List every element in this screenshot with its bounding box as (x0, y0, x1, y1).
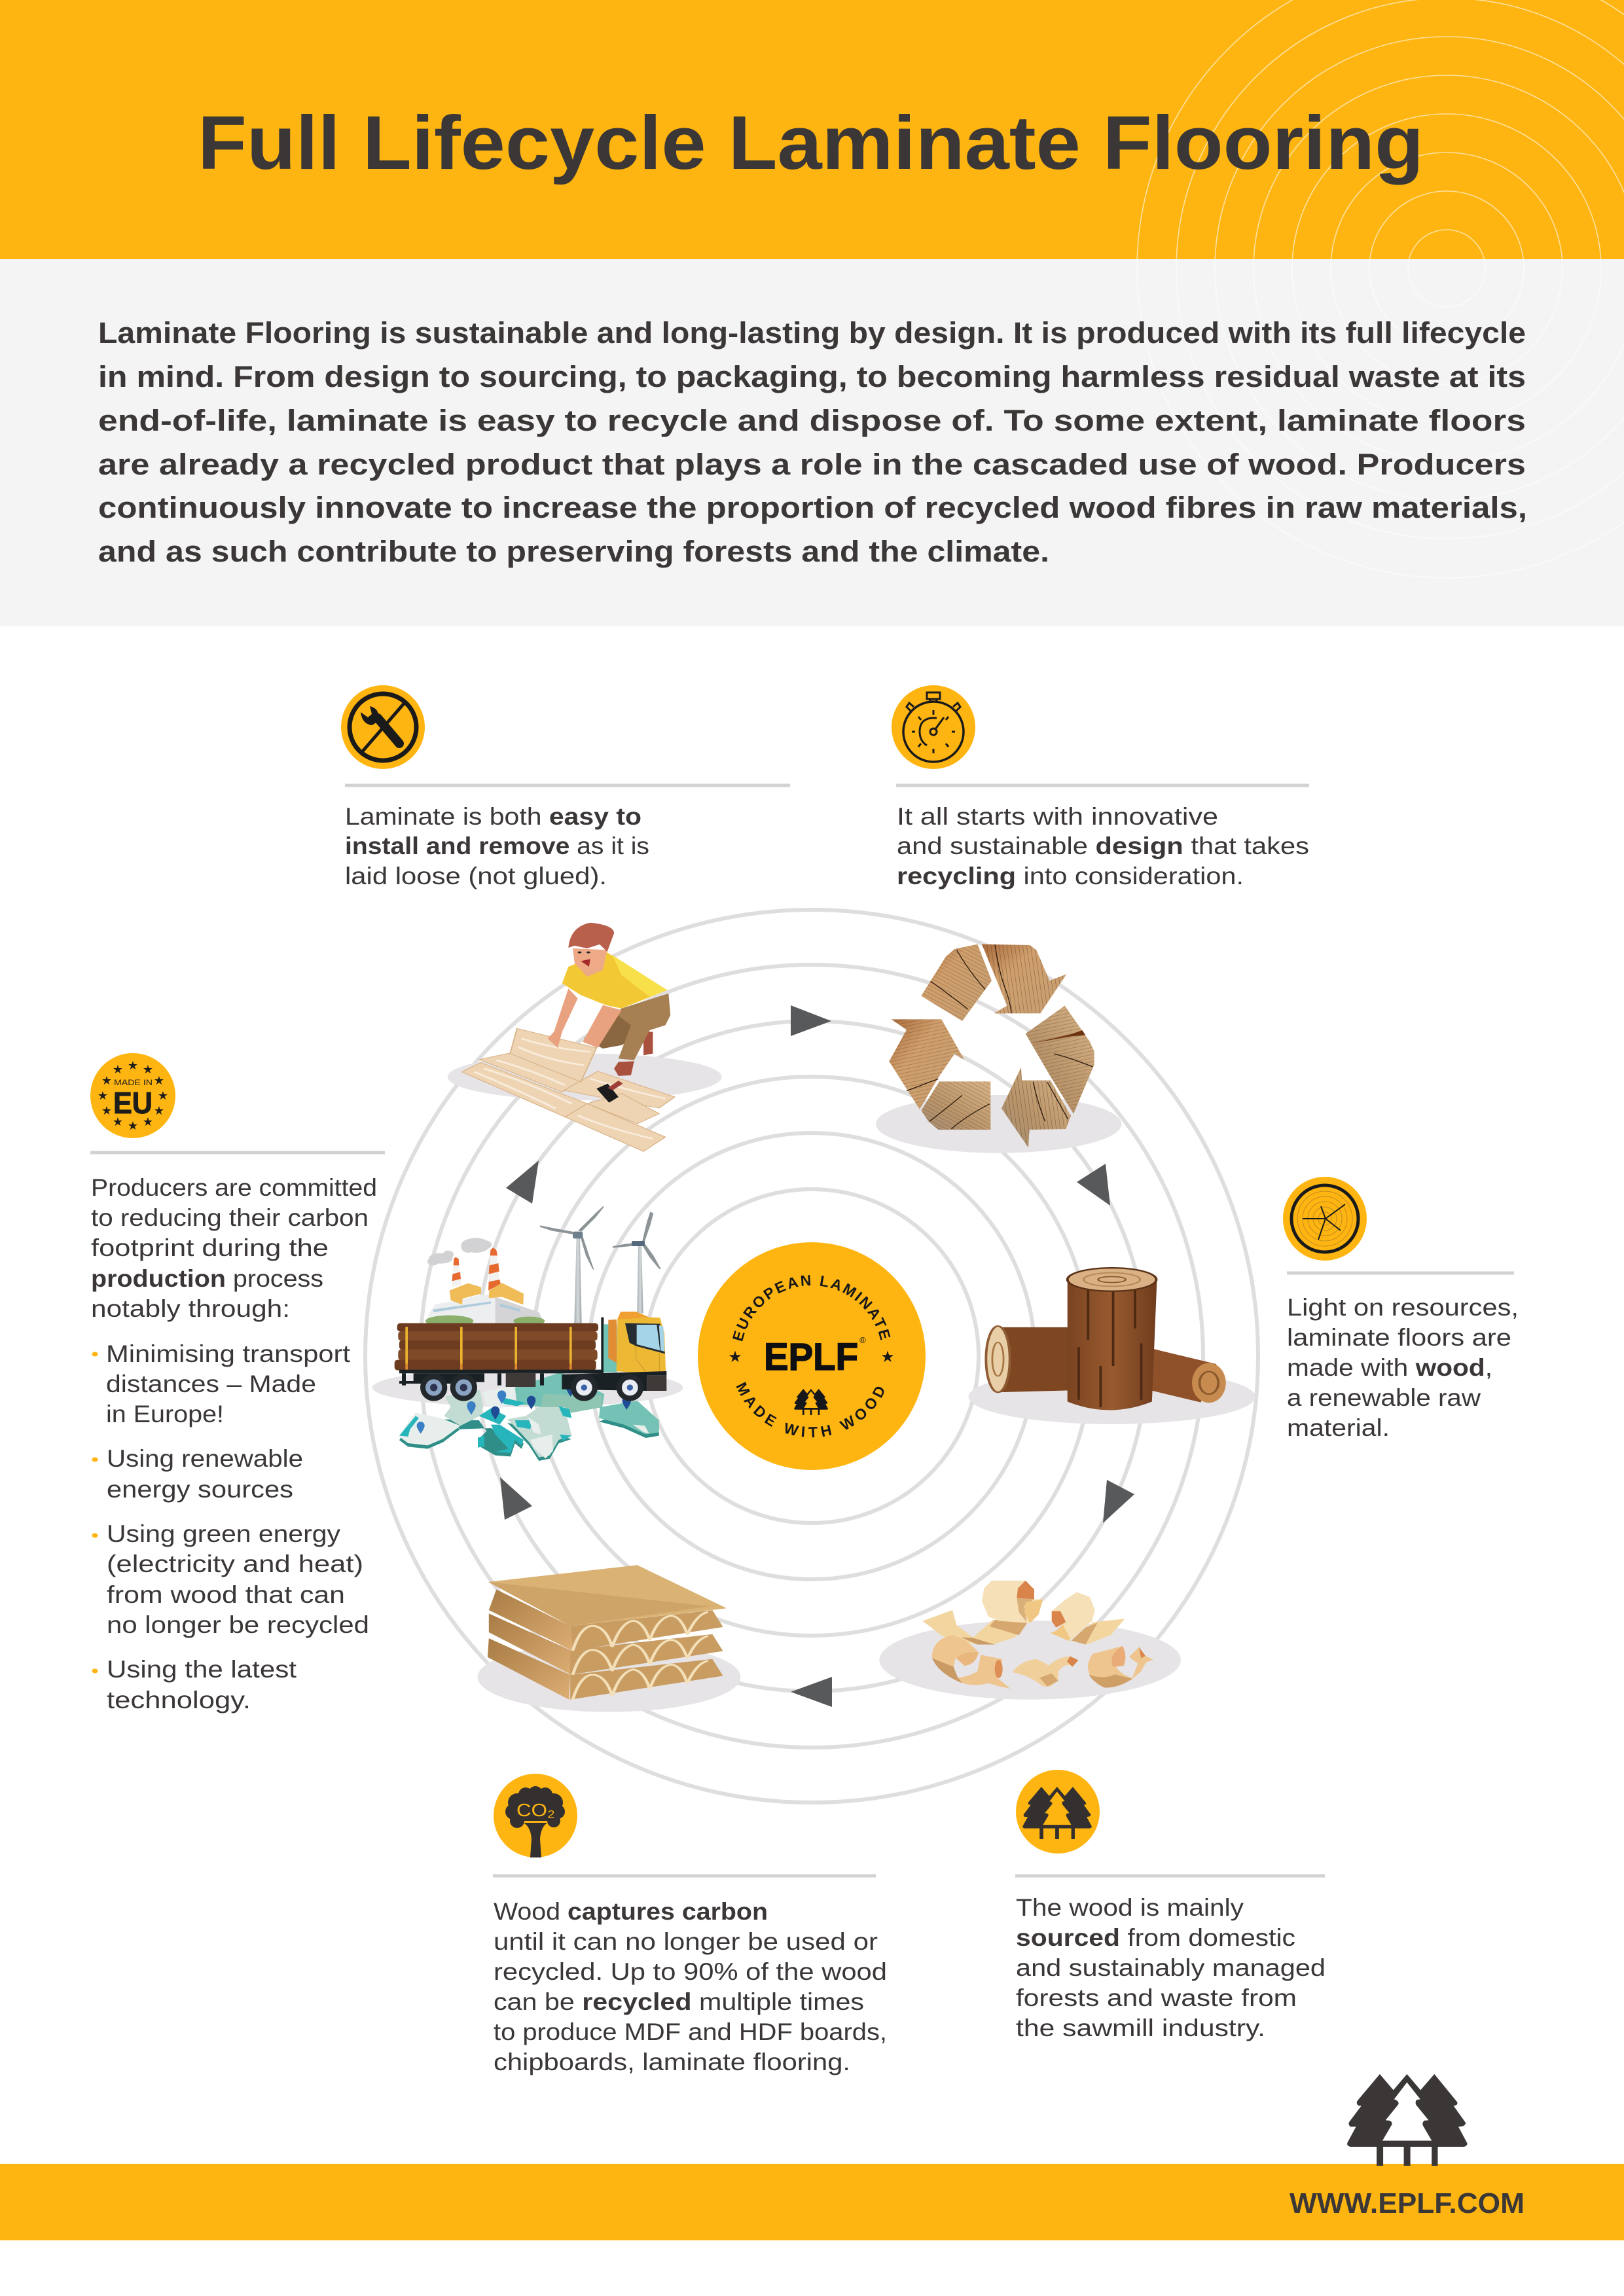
icon: made in EU: ★ (128, 1119, 138, 1133)
title: Full Lifecycle Laminate Flooring (198, 100, 1424, 185)
central EPLF logo: MADE WITH WOOD (736, 1382, 884, 1437)
text: made with wood , (1287, 1354, 1492, 1381)
text: until it can no longer be used or (494, 1928, 878, 1955)
intro text block: in mind. From design to sourcing, to packaging, to becoming harmless residual waste at its (98, 360, 1526, 393)
curl five (1088, 1646, 1153, 1687)
text: and sustainably managed (1016, 1954, 1326, 1981)
text (494, 1898, 887, 2075)
text: recycled. Up to 90% of the wood (494, 1958, 887, 1985)
text: sourced from domestic (1016, 1924, 1295, 1951)
icon: made in EU: ★ (143, 1115, 153, 1129)
text (897, 803, 1309, 889)
footer website: WWW.EPLF.COM (1290, 2187, 1525, 2219)
bullet list: energy sources (107, 1476, 293, 1503)
illustration: corrugated board stack (478, 1565, 740, 1712)
map of Europe (399, 1372, 659, 1461)
icon: made in EU: ★ (154, 1074, 164, 1088)
standing log (1068, 1280, 1157, 1410)
text: laminate floors are (1287, 1324, 1511, 1351)
text: It all starts with innovative (897, 803, 1218, 830)
worker legs (643, 1032, 653, 1055)
central EPLF logo (698, 1242, 926, 1470)
cycle arrows (500, 1005, 1134, 1707)
text: Light on resources, (1287, 1294, 1519, 1321)
footer tree logo (1347, 2074, 1468, 2166)
top sheet (488, 1565, 727, 1626)
worker shirt (562, 952, 667, 1009)
text: laid loose (not glued). (345, 863, 607, 889)
icon: wrench crossed out (341, 685, 425, 769)
bottom layer (488, 1638, 723, 1700)
worker arm front (583, 1005, 622, 1048)
intro panel background (0, 259, 1624, 626)
icon: made in EU: ★ (101, 1074, 112, 1088)
block: wood resource (1283, 1177, 1519, 1441)
block: captures carbon (493, 1774, 887, 2075)
icon: made in EU: ★ (113, 1063, 123, 1077)
illustration: truck, factory, turbines and Europe map (372, 1206, 683, 1461)
central EPLF logo: ★ (728, 1348, 742, 1366)
icon: trees (1016, 1770, 1100, 1854)
left lying log (998, 1327, 1072, 1392)
floor planks (462, 1028, 675, 1151)
text: notably through: (91, 1295, 290, 1322)
footer band (0, 2164, 1624, 2240)
text: to reducing their carbon (91, 1204, 369, 1231)
text: Wood captures carbon (494, 1898, 768, 1925)
factory (425, 1238, 545, 1327)
text: production process (91, 1265, 323, 1292)
icon: made in EU: ★ (154, 1104, 164, 1118)
lifecycle rings (365, 910, 1258, 1803)
intro text block: end-of-life, laminate is easy to recycle and dispose of. To some extent, laminate floors (98, 404, 1526, 437)
truck cab (562, 1312, 666, 1391)
bullet list: Using renewable (107, 1445, 303, 1472)
intro text block: continuously innovate to increase the proportion of recycled wood fibres in raw materials, (98, 491, 1527, 524)
intro text block: Laminate Flooring is sustainable and long-lasting by design. It is produced with its full lifecycle (98, 316, 1526, 350)
worker head (573, 948, 607, 977)
text: a renewable raw (1287, 1384, 1481, 1411)
text (1016, 1894, 1326, 2041)
bullet list: Minimising transport (106, 1340, 351, 1367)
text: and sustainable design that takes (897, 833, 1309, 859)
text (91, 1174, 377, 1322)
text: Laminate is both easy to (345, 803, 641, 830)
bullet list: (electricity and heat) (107, 1551, 363, 1577)
curl four (1013, 1657, 1078, 1687)
bullet list: Using the latest (107, 1656, 297, 1683)
icon: log cross-section (1283, 1177, 1367, 1261)
text: install and remove as it is (345, 833, 649, 859)
worker arm behind (548, 988, 578, 1048)
bullet list: Using green energy (107, 1520, 341, 1547)
icon: made in EU: ★ (143, 1063, 153, 1077)
bullet list: from wood that can (107, 1581, 345, 1608)
illustration: installer laying laminate (448, 923, 722, 1151)
text (1287, 1294, 1519, 1441)
text: Producers are committed (91, 1174, 377, 1201)
block: design (892, 685, 1309, 889)
right lying log (1151, 1349, 1216, 1403)
text: recycling into consideration. (897, 863, 1244, 889)
illustration: wooden recycling symbol (876, 944, 1121, 1153)
text: forests and waste from (1016, 1984, 1297, 2011)
text: the sawmill industry. (1016, 2015, 1265, 2041)
truck wheels (420, 1374, 643, 1401)
icon: made in EU: ★ (98, 1089, 108, 1103)
log trailer (395, 1318, 604, 1387)
text: to produce MDF and HDF boards, (494, 2018, 887, 2045)
mallet (596, 1084, 619, 1103)
central EPLF logo: EUROPEAN LAMINATE (732, 1275, 890, 1342)
header band (0, 0, 1624, 259)
text: footprint during the (91, 1234, 329, 1261)
bullet list: technology. (107, 1687, 251, 1713)
intro text block (98, 316, 1527, 568)
icon: made in EU: EU (113, 1086, 153, 1120)
block: easy to install (341, 685, 790, 889)
icon: CO2 tree: CO₂ (516, 1800, 555, 1820)
text: material. (1287, 1414, 1390, 1441)
text: chipboards, laminate flooring. (494, 2049, 850, 2075)
icon: made in EU: ★ (113, 1115, 123, 1129)
central EPLF logo: ★ (880, 1348, 895, 1366)
icon: CO2 tree (494, 1774, 577, 1857)
icon: made in EU: ★ (158, 1089, 168, 1103)
icon: stopwatch (892, 685, 975, 769)
illustration: logs (969, 1268, 1255, 1424)
intro text block: are already a recycled product that plays a role in the cascaded use of wood. Producers (98, 448, 1526, 481)
top layer (489, 1590, 573, 1651)
central EPLF logo: ® (859, 1335, 866, 1345)
central EPLF logo: EPLF (764, 1336, 858, 1378)
wind turbines (539, 1206, 661, 1323)
icon: made in EU: ★ (101, 1104, 112, 1118)
icon: made in EU (90, 1053, 175, 1138)
intro text block: and as such contribute to preserving forests and the climate. (98, 535, 1049, 568)
text (345, 803, 649, 889)
block: production (90, 1053, 385, 1713)
curl two (1051, 1592, 1125, 1645)
middle layer (489, 1613, 723, 1675)
curl one (922, 1581, 1043, 1645)
bullet list: no longer be recycled (107, 1611, 369, 1638)
bullet list (92, 1340, 369, 1713)
block: sourced wood (1015, 1770, 1326, 2041)
bullet list: in Europe! (106, 1401, 224, 1427)
illustration: wood shavings (879, 1581, 1181, 1700)
text: can be recycled multiple times (494, 1988, 864, 2015)
bullet list: distances – Made (106, 1371, 316, 1397)
icon: made in EU: MADE IN (114, 1078, 153, 1087)
icon: made in EU: ★ (128, 1059, 138, 1073)
text: The wood is mainly (1016, 1894, 1244, 1921)
curl three (931, 1635, 1010, 1689)
